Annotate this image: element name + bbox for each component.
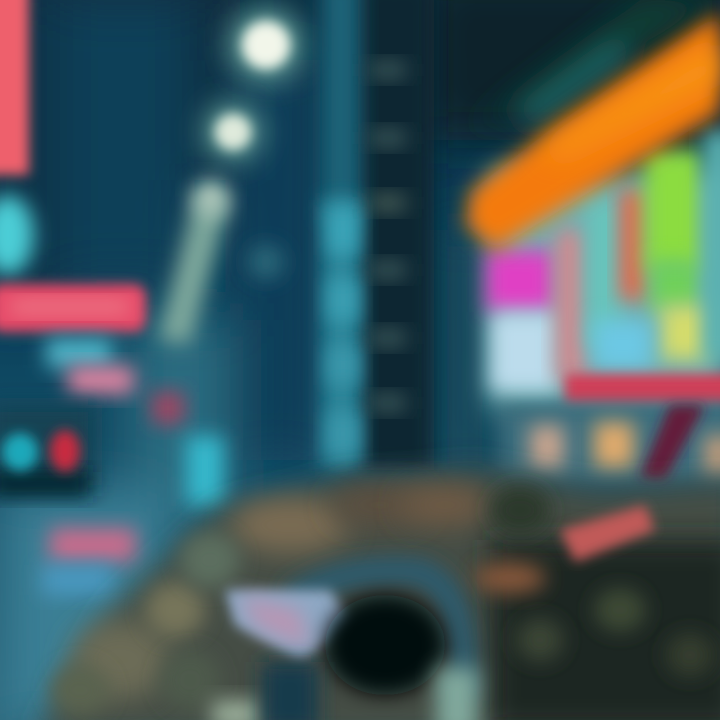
cyan column light: [186, 436, 224, 506]
neon signs on the left: [0, 0, 224, 595]
orange banner: [466, 12, 720, 250]
teal arch: [290, 571, 463, 700]
red small light: [152, 392, 184, 424]
pink horizontal sign: [0, 284, 146, 332]
street lights: [158, 7, 304, 345]
lower pink sign: [50, 528, 136, 562]
red band and lower shop: [500, 374, 720, 485]
cyan sign: [0, 195, 34, 275]
pale post: [436, 668, 478, 720]
tower with cyan stripe: [322, 0, 434, 470]
dark shadow: [325, 595, 445, 695]
pale blue panel: [225, 590, 355, 660]
red vertical sign: [0, 0, 29, 175]
pale blue sign: [46, 338, 112, 368]
colourful billboard: [486, 130, 720, 410]
small pink sign: [68, 366, 134, 394]
car on the street: [0, 405, 95, 496]
rubble foreground: [40, 470, 720, 720]
green haze above banner: [470, 0, 720, 130]
